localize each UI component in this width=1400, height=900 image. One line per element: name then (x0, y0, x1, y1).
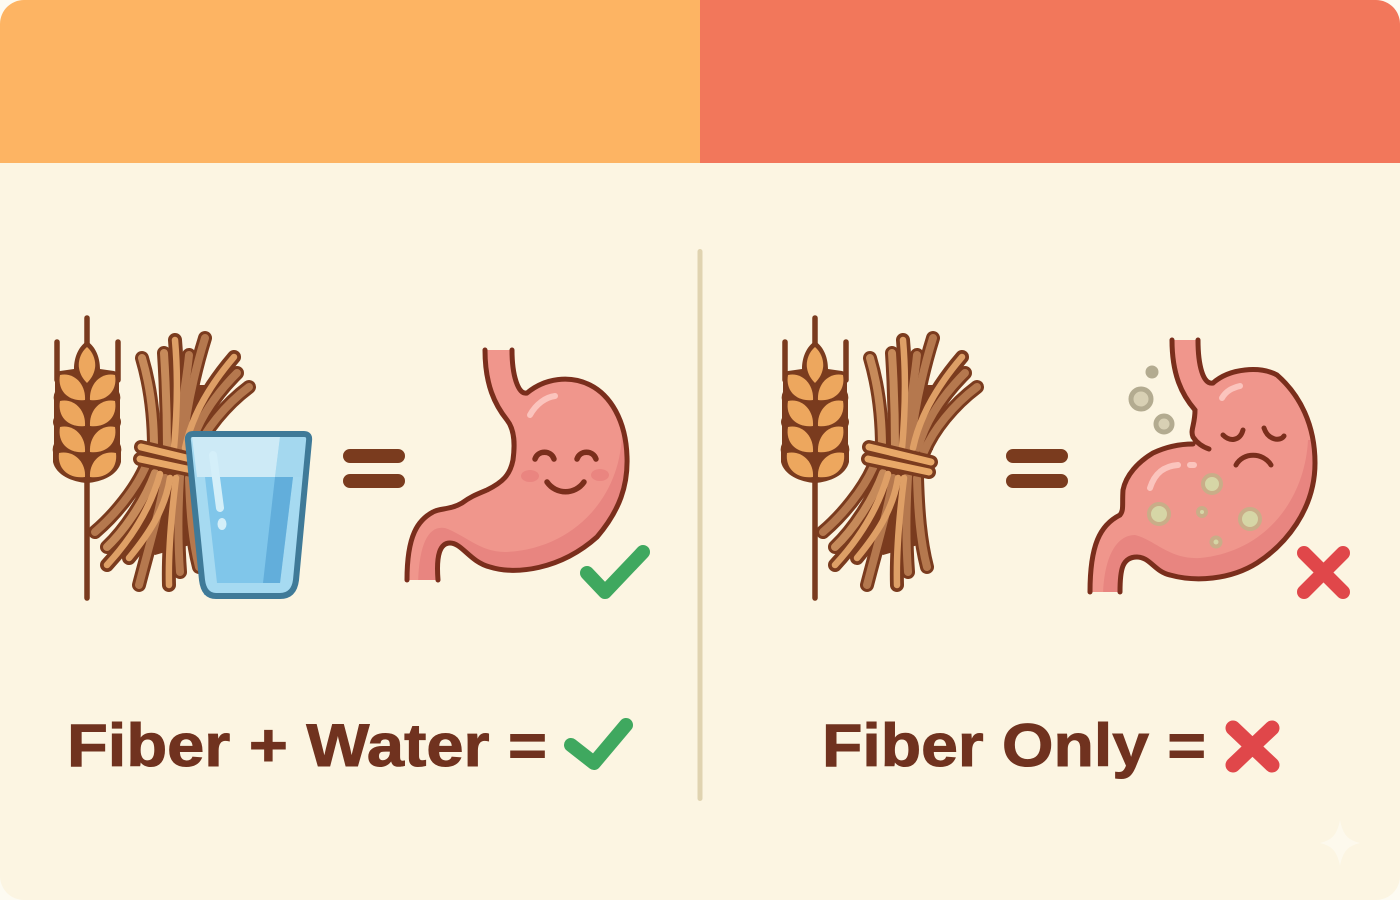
icon: happy stomach (407, 350, 640, 590)
icon: green check (label) (571, 725, 626, 763)
icon: fiber bundle (left) (95, 338, 249, 585)
icon: sad stomach (1090, 340, 1330, 600)
label: Fiber + Water: Fiber + Water = (67, 712, 547, 779)
icon: green check (stomach) (587, 552, 643, 592)
face: sad (1223, 428, 1284, 465)
icon: equals sign (left) (350, 456, 398, 481)
icon: gas bubbles outside stomach (1131, 368, 1172, 432)
icon: wheat stalk (right) (781, 318, 849, 598)
icon: glass of water (188, 434, 309, 596)
icon: wheat stalk (left) (53, 318, 121, 598)
icon: equals sign (right) (1013, 456, 1061, 481)
header band: red (700, 0, 1400, 163)
bubbles inside stomach (1149, 475, 1260, 546)
face: smile (521, 452, 609, 492)
icon: red cross (stomach) (1304, 553, 1343, 592)
icon: red cross (label) (1233, 728, 1272, 765)
center divider (698, 249, 702, 801)
header band: orange (0, 0, 700, 163)
label: Fiber Only: Fiber Only = (822, 712, 1206, 779)
icon: fiber bundle (right) (823, 338, 977, 585)
watermark sparkle (1320, 820, 1360, 866)
